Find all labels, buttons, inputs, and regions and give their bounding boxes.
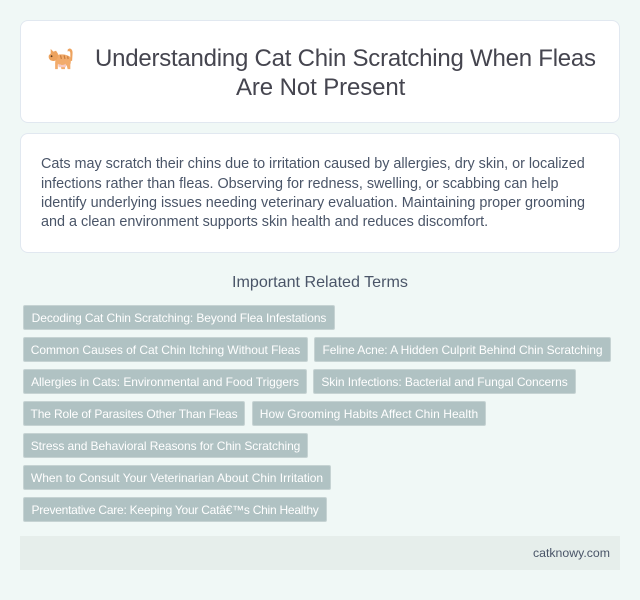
panel: summary card xyxy=(20,133,620,253)
title: Are Not Present xyxy=(236,74,405,101)
text block: summary: Cats may scratch their chins due to irritation caused by allergies, dry skin, or localized xyxy=(41,156,585,172)
tag list: Skin Infections: Bacterial and Fungal Concerns xyxy=(321,375,568,389)
text block: summary: infections rather than fleas. Observing for redness, swelling, or scabbing can help xyxy=(41,176,559,192)
tag list: When to Consult Your Veterinarian About Chin Irritation xyxy=(31,471,323,485)
tag list: Preventative Care: Keeping Your Catâ€™s Chin Healthy xyxy=(31,503,319,517)
tag list: Decoding Cat Chin Scratching: Beyond Flea Infestations xyxy=(32,311,326,325)
text block: summary: identify underlying issues needing veterinary evaluation. Maintaining proper grooming xyxy=(41,195,585,211)
tag list: Stress and Behavioral Reasons for Chin Scratching xyxy=(31,439,300,453)
title xyxy=(95,45,596,101)
footer bar xyxy=(20,536,620,570)
tag list: Allergies in Cats: Environmental and Food Triggers xyxy=(31,375,299,389)
heading: related terms: Important Related Terms xyxy=(232,273,408,291)
title: Understanding Cat Chin Scratching When Fleas xyxy=(95,45,596,72)
text block: summary: and a clean environment supports skin health and reduces discomfort. xyxy=(41,214,488,230)
tag list: How Grooming Habits Affect Chin Health xyxy=(260,407,478,421)
footer credit: catknowy.com xyxy=(533,546,610,560)
panel: title card xyxy=(20,20,620,123)
tag list: The Role of Parasites Other Than Fleas xyxy=(31,407,237,421)
tag list: Common Causes of Cat Chin Itching Without Fleas xyxy=(31,343,300,357)
tag list: Feline Acne: A Hidden Culprit Behind Chin Scratching xyxy=(322,343,602,357)
text block: summary xyxy=(41,156,585,230)
tag list xyxy=(23,305,611,522)
icon: cat xyxy=(48,48,73,70)
